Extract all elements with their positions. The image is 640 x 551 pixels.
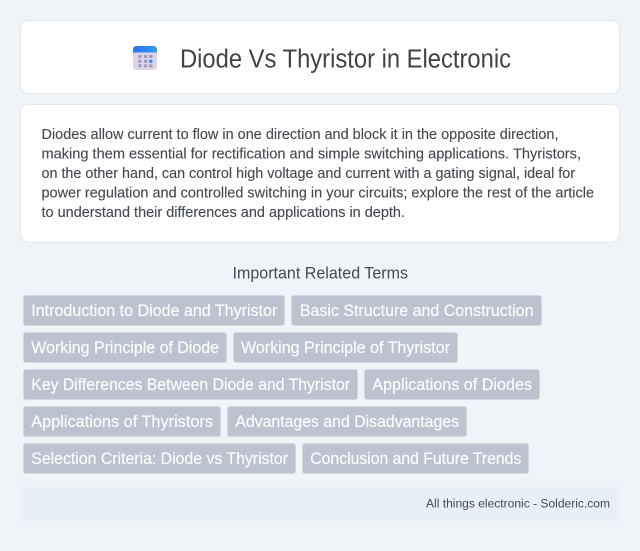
description text <box>42 127 594 221</box>
tag <box>302 444 528 474</box>
tag <box>228 406 466 436</box>
tag <box>292 296 542 326</box>
tag: Conclusion and Future Trends <box>310 450 521 468</box>
tag: Advantages and Disadvantages <box>235 413 459 431</box>
tag <box>24 296 284 326</box>
tag list <box>24 296 542 474</box>
header panel <box>20 20 620 94</box>
tag: Working Principle of Thyristor <box>241 339 450 357</box>
description text: to understand their differences and applications in depth. <box>42 205 405 221</box>
tag: Basic Structure and Construction <box>300 302 534 320</box>
icon: calendar grid <box>133 46 157 70</box>
tag: Working Principle of Diode <box>31 339 219 357</box>
description text: on the other hand, can control high voltage and current with a gating signal, ideal for <box>42 166 575 182</box>
tag <box>364 370 540 400</box>
tag <box>24 332 226 362</box>
description text: power regulation and controlled switching in your circuits; explore the rest of the article <box>42 186 594 202</box>
tag <box>234 332 458 362</box>
title: Diode Vs Thyristor in Electronic <box>180 46 511 74</box>
tag: Applications of Thyristors <box>31 413 213 431</box>
tag: Applications of Diodes <box>372 376 532 394</box>
tag <box>24 444 296 474</box>
description text: making them essential for rectification and simple switching applications. Thyristors, <box>42 146 581 162</box>
footer bar <box>20 487 620 521</box>
tag: Selection Criteria: Diode vs Thyristor <box>31 450 288 468</box>
description text: Diodes allow current to flow in one direction and block it in the opposite direction, <box>42 127 558 143</box>
tag <box>24 406 220 436</box>
footer credit: All things electronic - Solderic.com <box>426 496 610 510</box>
tag: Key Differences Between Diode and Thyristor <box>31 376 350 394</box>
tag: Introduction to Diode and Thyristor <box>31 302 278 320</box>
tag <box>24 370 358 400</box>
heading: important related terms: Important Related Terms <box>232 264 408 282</box>
panel: description <box>20 104 620 242</box>
